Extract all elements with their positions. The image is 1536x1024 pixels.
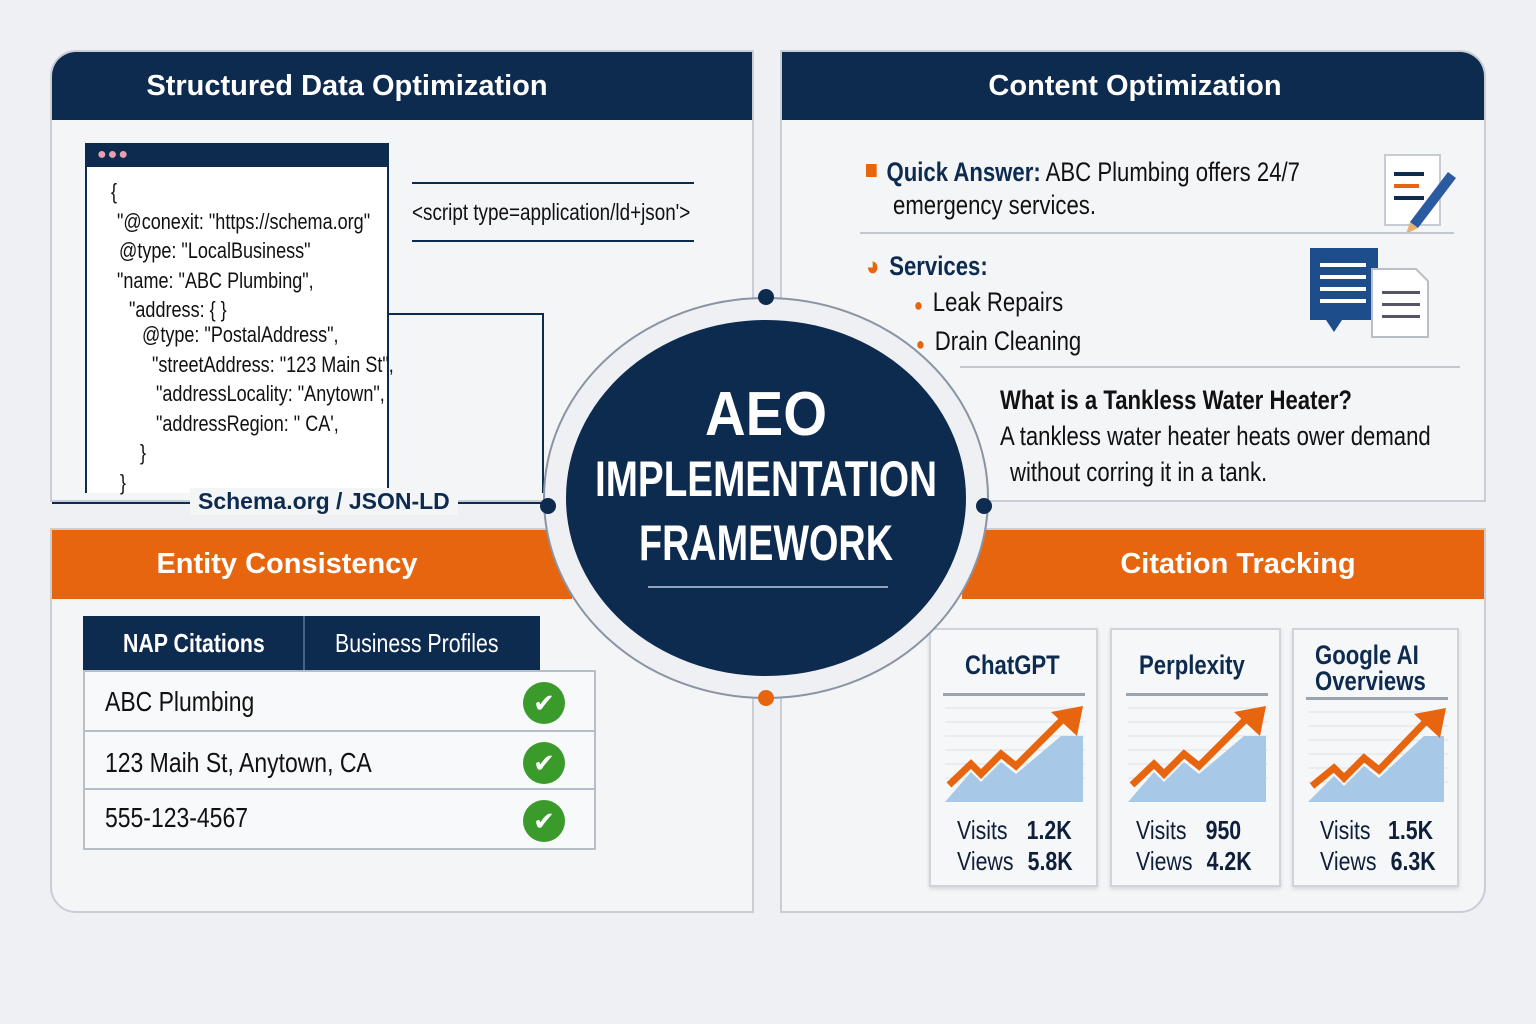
card: ChatGPT: Views 5.8K <box>957 846 1073 876</box>
heading: citation <box>962 530 1484 599</box>
card: Perplexity <box>1110 628 1281 887</box>
content: services: ● Drain Cleaning <box>916 326 1081 356</box>
heading: citation: Citation Tracking <box>1120 548 1356 580</box>
panel: content optimization <box>780 50 1486 502</box>
schema label: Schema.org / JSON-LD <box>198 488 450 514</box>
panel: entity consistency <box>50 528 754 913</box>
code window: @type: "LocalBusiness" <box>119 238 311 263</box>
NAP table <box>83 616 596 850</box>
card: ChatGPT: Visits 1.2K <box>957 815 1072 845</box>
heading: content: Content Optimization <box>988 70 1282 102</box>
script tag label <box>412 182 694 242</box>
heading: structured data: Structured Data Optimization <box>146 70 548 102</box>
content: services <box>866 251 1081 356</box>
code continued: } <box>140 440 146 465</box>
script tag label: <script type=application/ld+json'> <box>412 199 690 225</box>
panel: structured data <box>50 50 754 502</box>
content: FAQ: What is a Tankless Water Heater? <box>1000 385 1352 415</box>
code continued: } <box>120 470 126 494</box>
card: Perplexity: Visits 950 <box>1136 815 1241 845</box>
rows <box>83 670 596 850</box>
card: ChatGPT <box>929 628 1098 887</box>
icon: document pencil <box>1384 154 1456 232</box>
tabs: NAP Citations <box>123 628 265 658</box>
code continued <box>120 322 394 494</box>
content: services: ◕ Services: <box>866 251 988 281</box>
code window: "@conexit: "https://schema.org" <box>117 208 370 234</box>
content: FAQ: without corring it in a tank. <box>1010 457 1267 487</box>
tabs <box>83 616 540 670</box>
content: services: ● Leak Repairs <box>914 287 1063 317</box>
code continued: "addressLocality: "Anytown", <box>156 381 385 406</box>
center: AEO framework circle <box>540 289 992 706</box>
content: quick answer: emergency services. <box>893 190 1096 220</box>
center: AEO framework circle: AEO <box>705 380 827 449</box>
rows: ✔ <box>533 806 555 836</box>
code continued: @type: "PostalAddress", <box>142 322 339 347</box>
content: FAQ <box>1000 385 1431 487</box>
center: AEO framework circle: FRAMEWORK <box>639 515 893 571</box>
code window: "name: "ABC Plumbing", <box>117 268 314 292</box>
rows: ABC Plumbing <box>105 686 254 717</box>
card: Google AI Overviews: Views 6.3K <box>1320 846 1436 876</box>
code window: ●●● <box>97 146 129 163</box>
card: Google AI Overviews <box>1292 628 1459 887</box>
card: Google AI Overviews: Visits 1.5K <box>1320 815 1433 845</box>
content: FAQ: A tankless water heater heats ower demand <box>1000 421 1431 451</box>
tabs: Business Profiles <box>335 628 499 658</box>
panel: citation tracking <box>780 528 1486 913</box>
code continued: "streetAddress: "123 Main St", <box>152 352 394 376</box>
code window: { <box>111 179 117 204</box>
heading: content <box>782 52 1484 120</box>
heading: entity: Entity Consistency <box>156 548 418 580</box>
code continued: "addressRegion: " CA', <box>156 410 339 436</box>
rows: 555-123-4567 <box>105 802 248 833</box>
code window back <box>388 313 544 493</box>
code window <box>85 143 389 493</box>
code window: "address: { } <box>129 297 227 322</box>
rows: ✔ <box>533 688 555 718</box>
heading: structured data <box>52 52 752 120</box>
content: quick answer <box>866 157 1300 220</box>
card: ChatGPT: ChatGPT <box>965 650 1060 680</box>
rows: ✔ <box>533 748 555 778</box>
card: Google AI Overviews: Google AI <box>1315 640 1419 670</box>
icon: documents <box>1310 248 1429 338</box>
card: Google AI Overviews: Overviews <box>1315 666 1426 696</box>
card: Perplexity: Views 4.2K <box>1136 846 1252 876</box>
content: quick answer: Quick Answer: ABC Plumbing offers 24/7 <box>886 157 1300 187</box>
rows: 123 Maih St, Anytown, CA <box>105 747 372 778</box>
heading: entity <box>52 530 572 599</box>
card: Perplexity: Perplexity <box>1139 650 1245 680</box>
